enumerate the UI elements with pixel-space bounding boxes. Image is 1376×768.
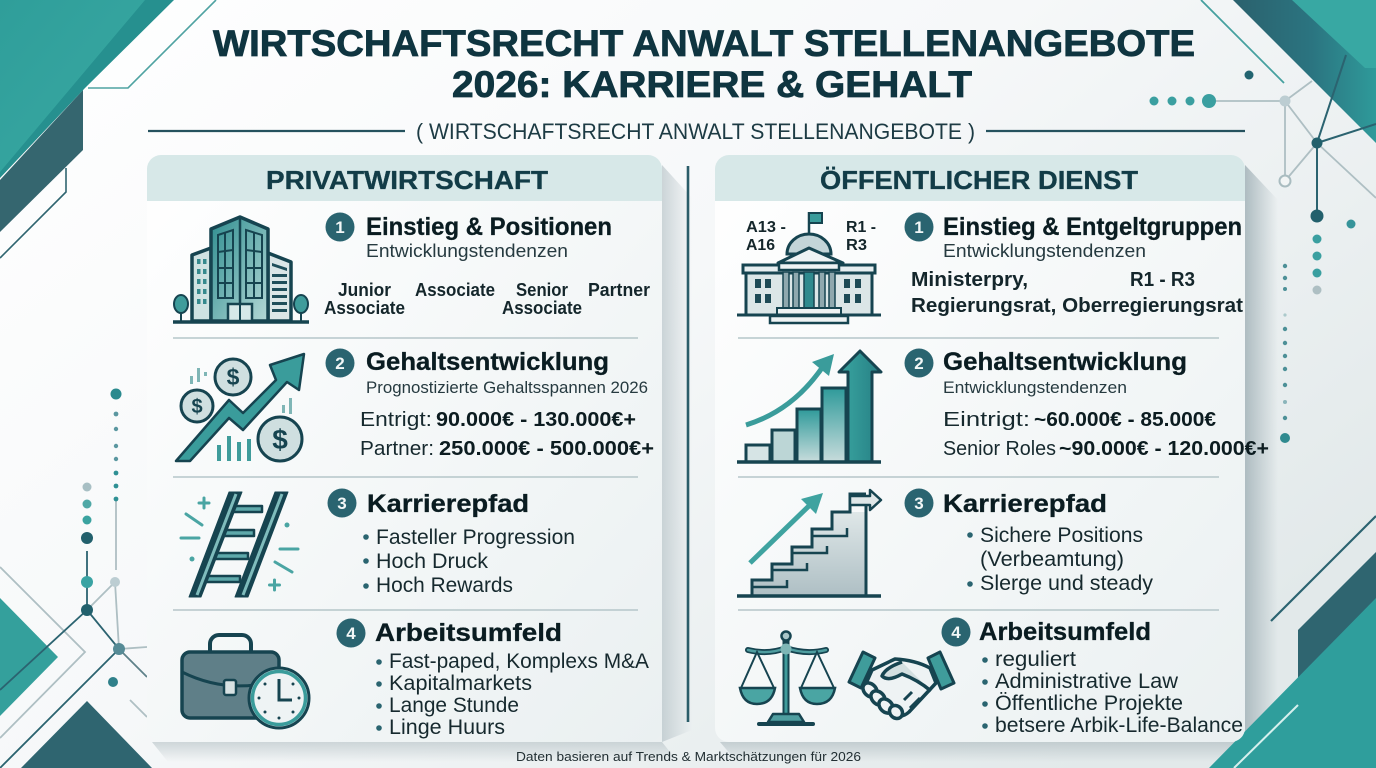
section 4 text (942, 618, 1243, 737)
section 4 text: reguliert (995, 648, 1076, 671)
section 3 text (904, 488, 1153, 595)
section 4 text (336, 618, 649, 739)
section 3 text: Fasteller Progression (376, 526, 575, 549)
section 4 text: Administrative Law (995, 670, 1179, 693)
section 1 text: Partner (588, 280, 650, 300)
pay grade labels: A13 - (746, 219, 786, 236)
section 4 text: Öffentliche Projekte (995, 692, 1183, 715)
panel: Öffentlicher Dienst (715, 155, 1269, 742)
section 4 text: Arbeitsumfeld (979, 618, 1151, 646)
section 3 text: 3 (337, 494, 347, 513)
title: 2026: KARRIERE & GEHALT (452, 64, 972, 105)
panel header: ÖFFENTLICHER DIENST (820, 165, 1138, 195)
section 1 text: Associate (324, 298, 405, 318)
section 3 text: Hoch Druck (376, 550, 489, 573)
section 2 text: Eintrigt: (943, 408, 1030, 431)
icon: salary growth arrow with coins: $ (227, 364, 240, 390)
section 3 text: Karrierepfad (367, 490, 529, 518)
icon: salary bars with arrow (737, 351, 881, 462)
icon: office building (173, 217, 309, 322)
section 2 text: Gehaltsentwicklung (943, 348, 1187, 376)
section 1 text (904, 212, 1243, 317)
section 1 text (324, 212, 650, 318)
section 1 text: Junior (338, 280, 391, 300)
icon: salary growth arrow with coins: $ (191, 396, 203, 418)
center divider (687, 166, 689, 722)
section 1 text: 1 (335, 218, 345, 237)
decoration: top-left shapes (0, 0, 216, 258)
section 2 text (904, 348, 1269, 460)
section 1 text: Regierungsrat, Oberregierungsrat (911, 295, 1243, 317)
section 1 text: 1 (914, 218, 924, 237)
section 4 text: Linge Huurs (389, 716, 505, 739)
section 2 text: Senior Roles (943, 437, 1056, 460)
section 4 text: Lange Stunde (389, 694, 519, 717)
section 2 text (326, 348, 654, 460)
panel: Privatwirtschaft (147, 155, 662, 742)
section 2 text: Gehaltsentwicklung (366, 348, 609, 376)
panel header (715, 155, 1245, 201)
panel header (147, 155, 662, 201)
icon: government building (737, 212, 881, 323)
section 2 text: ~90.000€ - 120.000€+ (1059, 438, 1269, 460)
icon: salary growth arrow with coins: $ (272, 424, 288, 455)
section 2 text: 2 (335, 354, 345, 373)
title: WIRTSCHAFTSRECHT ANWALT STELLENANGEBOTE (213, 23, 1195, 64)
section 4 text: Arbeitsumfeld (375, 619, 562, 647)
section 1 text: Entwicklungstendenzen (366, 240, 568, 261)
section 4 text: 4 (951, 623, 961, 642)
footer note: Daten basieren auf Trends & Marktschätzungen für 2026 (516, 750, 861, 764)
section 3 text: Karrierepfad (943, 490, 1107, 518)
section 1 text: Entwicklungstendenzen (943, 240, 1146, 261)
decoration: top-right shapes and network (1150, 0, 1376, 443)
section 2 text: Entwicklungstendenzen (943, 378, 1127, 397)
icon: career ladder (181, 492, 298, 597)
section 4 text: betsere Arbik-Life-Balance (995, 714, 1243, 737)
pay grade labels: A16 (746, 237, 775, 254)
section 2 text: ~60.000€ - 85.000€ (1034, 409, 1216, 431)
section 1 text: Associate (415, 280, 495, 300)
icon: handshake (849, 652, 954, 721)
section 3 text: Sichere Positions (980, 524, 1143, 547)
section 1 text: Einstieg & Entgeltgruppen (943, 213, 1242, 241)
section 3 text: 3 (914, 494, 924, 513)
section 2 text: 90.000€ - 130.000€+ (436, 409, 636, 431)
section 2 text: 250.000€ - 500.000€+ (439, 438, 654, 460)
section 4 text: 4 (346, 624, 356, 643)
icon: salary growth arrow with coins (176, 354, 304, 461)
section 4 text: Kapitalmarkets (389, 672, 532, 695)
icon: stairs with arrows (737, 490, 881, 596)
section 2 text: Partner: (360, 437, 434, 460)
section 1 text: Ministerpry, (911, 269, 1028, 291)
section 3 text (328, 488, 575, 597)
pay grade labels: R3 (846, 237, 867, 254)
section 1 text: R1 - R3 (1130, 269, 1195, 291)
subtitle: ( WIRTSCHAFTSRECHT ANWALT STELLENANGEBOTE ) (416, 119, 975, 144)
panel header: PRIVATWIRTSCHAFT (266, 165, 548, 195)
pay grade labels (746, 219, 876, 254)
section 2 text: Prognostizierte Gehaltsspannen 2026 (366, 378, 648, 397)
section 2 text: Entrigt: (360, 408, 432, 431)
decoration: bottom-left shapes and network (0, 388, 152, 768)
icon: scales of justice (740, 632, 835, 726)
decoration: bottom-right shapes (1209, 516, 1376, 768)
pay grade labels: R1 - (846, 219, 876, 236)
section 1 text: Senior (516, 280, 568, 300)
section 3 text: (Verbeamtung) (980, 548, 1124, 571)
section 2 text: 2 (914, 354, 924, 373)
title (213, 23, 1195, 105)
section 1 text: Einstieg & Positionen (366, 213, 612, 241)
section 4 text: Fast-paped, Komplexs M&A (389, 650, 649, 673)
icon: briefcase with clock (182, 635, 309, 728)
section 3 text: Slerge und steady (980, 572, 1153, 595)
section 3 text: Hoch Rewards (376, 574, 513, 597)
section 1 text: Associate (502, 298, 582, 318)
panel shadows (152, 165, 1278, 762)
